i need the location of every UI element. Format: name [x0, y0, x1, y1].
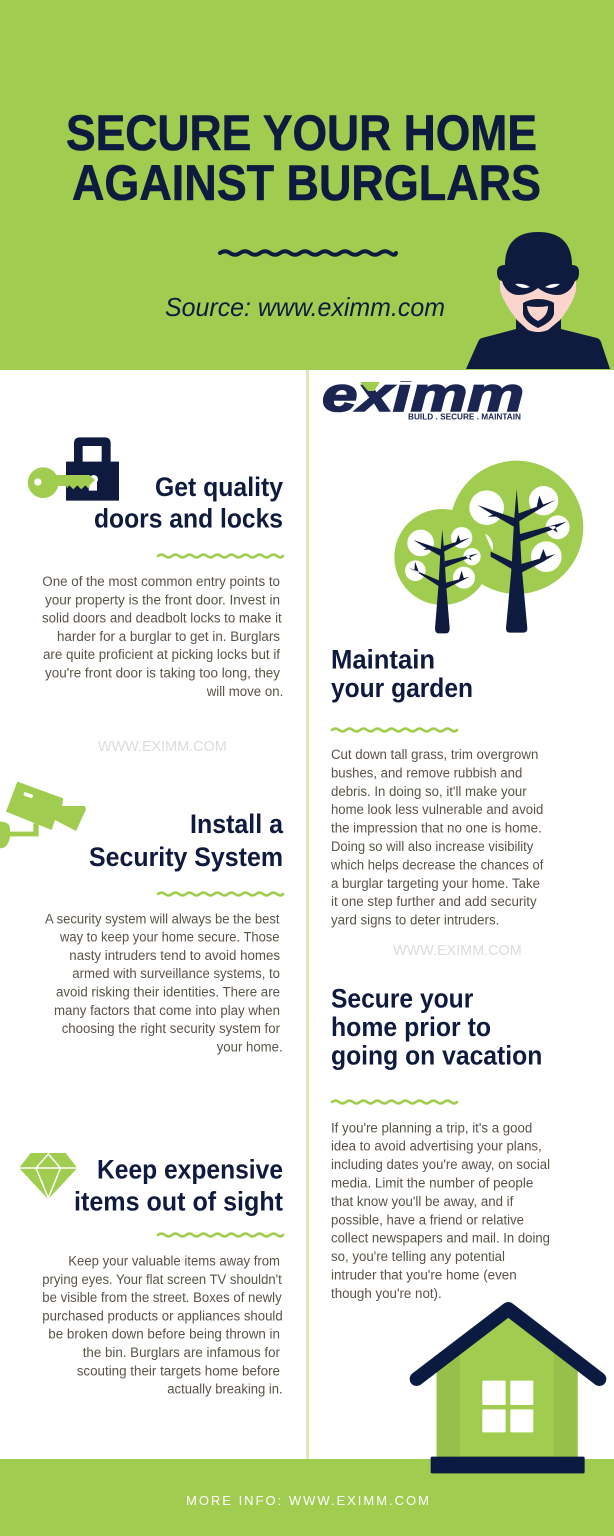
- body text: scouting their targets home before: [77, 1363, 280, 1378]
- watermark right: WWW.EXIMM.COM: [393, 943, 522, 959]
- body text: actually breaking in.: [167, 1382, 283, 1397]
- body text: which helps decrease the chances of: [330, 857, 544, 872]
- logo: eximm: eximm: [322, 369, 524, 422]
- body text: will move on.: [206, 684, 283, 699]
- body text: it one step further and add security: [331, 894, 537, 909]
- icon: padlock and key: [28, 437, 119, 501]
- title: [66, 105, 541, 211]
- heading: Get quality: [155, 472, 283, 502]
- wavy underline: [158, 893, 283, 895]
- panel: footer band: [0, 1459, 614, 1536]
- heading: [89, 809, 284, 872]
- body text: solid doors and deadbolt locks to make it: [42, 611, 282, 626]
- body text: avoid risking their identities. There are: [56, 984, 280, 1000]
- body text: a burglar targeting your home. Take: [331, 876, 540, 891]
- body text: your home.: [217, 1039, 283, 1054]
- body text: debris. In doing so, it'll make your: [331, 784, 527, 799]
- panel: header banner: [0, 0, 614, 370]
- icon: security camera: [0, 782, 86, 848]
- body text: [330, 747, 544, 928]
- heading: [74, 1154, 283, 1216]
- logo: eximm: BUILD . SECURE . MAINTAIN: [408, 412, 521, 422]
- wavy underline: [158, 1234, 283, 1236]
- icon: masked burglar: [466, 232, 610, 369]
- column divider: [306, 370, 309, 1460]
- heading: Secure your: [331, 984, 474, 1014]
- body text: so, you're telling any potential: [331, 1249, 505, 1264]
- body text: be visible from the street. Boxes of newly: [42, 1290, 282, 1305]
- body text: you're front door is taking too long, they: [45, 666, 280, 680]
- heading: Install a: [190, 809, 284, 839]
- wavy divider: [220, 251, 396, 255]
- body text: including dates you're away, on social: [331, 1157, 550, 1172]
- heading: Security System: [89, 842, 283, 872]
- body text: possible, have a friend or relative: [331, 1212, 524, 1227]
- panel: garden: [330, 461, 583, 928]
- body text: be broken down before being thrown in: [48, 1327, 280, 1342]
- body text: your property is the front door. Invest in: [45, 592, 280, 607]
- body text: the bin. Burglars are infamous for: [83, 1345, 280, 1360]
- body text: yard signs to deter intruders.: [331, 913, 499, 928]
- panel: doors and locks: [28, 437, 283, 699]
- body text: the impression that no one is home.: [331, 821, 542, 836]
- body text: bushes, and remove rubbish and: [331, 765, 522, 780]
- heading: home prior to: [331, 1012, 491, 1042]
- wavy underline: [158, 555, 283, 557]
- body text: way to keep your home secure. Those: [59, 930, 279, 945]
- body text: If you're planning a trip, it's a good: [331, 1120, 532, 1135]
- icon: diamond: [19, 1153, 77, 1199]
- heading: [331, 984, 542, 1070]
- footer text: MORE INFO: WWW.EXIMM.COM: [186, 1493, 429, 1508]
- heading: [94, 472, 283, 534]
- body text: collect newspapers and mail. In doing: [331, 1231, 550, 1246]
- body text: choosing the right security system for: [62, 1021, 280, 1036]
- heading: going on vacation: [331, 1040, 542, 1070]
- body text: harder for a burglar to get in. Burglars: [57, 629, 280, 644]
- heading: Keep expensive: [97, 1154, 283, 1184]
- body text: A security system will always be the best: [45, 911, 280, 926]
- body text: One of the most common entry points to: [42, 574, 280, 589]
- icon: two trees: [394, 461, 583, 633]
- body text: though you're not).: [331, 1286, 442, 1301]
- heading: your garden: [331, 673, 473, 703]
- watermark left: WWW.EXIMM.COM: [98, 739, 227, 755]
- body text: [331, 1120, 550, 1301]
- wavy underline: [332, 729, 457, 731]
- heading: Maintain: [331, 644, 435, 674]
- title: SECURE YOUR HOME: [66, 105, 537, 161]
- body text: home look less vulnerable and avoid: [331, 802, 543, 817]
- body text: Doing so will also increase visibility: [331, 839, 534, 854]
- heading: doors and locks: [94, 504, 283, 534]
- title: AGAINST BURGLARS: [72, 155, 541, 211]
- body text: media. Limit the number of people: [331, 1176, 533, 1190]
- body text: [45, 911, 283, 1054]
- body text: many factors that come into play when: [54, 1003, 280, 1018]
- body text: armed with surveillance systems, to: [72, 966, 280, 981]
- heading: [331, 644, 473, 703]
- panel: vacation: [331, 984, 550, 1301]
- body text: prying eyes. Your flat screen TV shouldn't: [42, 1272, 282, 1287]
- panel: expensive items: [19, 1153, 283, 1397]
- panel: security system: [0, 782, 284, 1054]
- logo: eximm: [322, 381, 522, 420]
- body text: [42, 1254, 283, 1397]
- body text: that know you'll be away, and if: [331, 1194, 514, 1209]
- body text: idea to avoid advertising your plans,: [331, 1139, 542, 1154]
- body text: are quite proficient at picking locks but if: [43, 647, 280, 662]
- body text: Cut down tall grass, trim overgrown: [331, 747, 538, 762]
- source line: Source: www.eximm.com: [165, 292, 445, 322]
- body text: [42, 574, 283, 699]
- body text: Keep your valuable items away from: [68, 1254, 280, 1268]
- body text: purchased products or appliances should: [42, 1308, 283, 1323]
- icon: house: [417, 1309, 599, 1473]
- body text: intruder that you're home (even: [331, 1268, 517, 1282]
- body text: nasty intruders tend to avoid homes: [69, 948, 280, 963]
- wavy underline: [332, 1101, 457, 1103]
- heading: items out of sight: [74, 1186, 283, 1216]
